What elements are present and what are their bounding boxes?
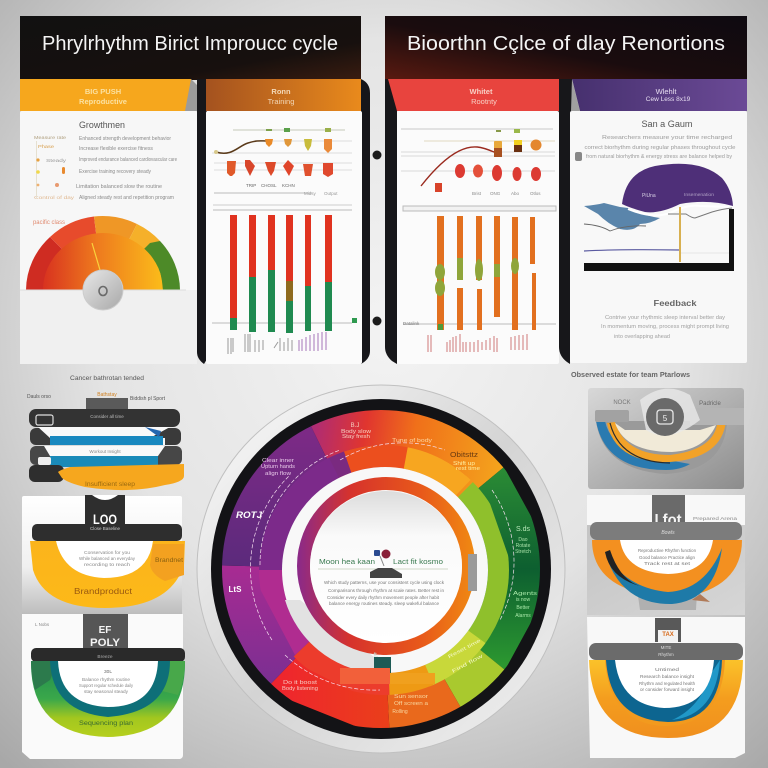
wedge labels: Sun sensor <box>394 694 428 700</box>
center body text: Which study patterns, use your consistent cycle using clock <box>324 580 445 586</box>
card: wave overview: Feedback <box>654 299 697 308</box>
stacked band group: Bathstay <box>97 392 117 398</box>
card: gray dial <box>588 388 744 489</box>
green bar blobs <box>435 258 519 330</box>
panel: right stacked cards <box>571 370 745 758</box>
card: wave overview: Wlehlt <box>656 87 677 96</box>
red markers <box>435 164 541 192</box>
bar labels: CHOSL <box>261 183 277 188</box>
chart: semicircle gauge: pacific class <box>33 220 65 226</box>
bowl text: Conservation for you <box>84 550 130 556</box>
wedge labels <box>229 423 538 715</box>
white ring <box>282 467 488 673</box>
wedge labels: Alarms <box>515 613 531 619</box>
card: yellow bowl: Brandproduct <box>74 587 133 596</box>
stacked band group: Biddish pl Sport <box>130 396 166 402</box>
small left legend <box>34 135 75 200</box>
wedge labels: LtS <box>229 585 242 594</box>
left report title banner <box>20 16 361 80</box>
card: daily curve: Rootnty <box>471 97 497 106</box>
stacked band group <box>27 392 184 490</box>
card: wave overview: San a Gaum <box>642 119 692 129</box>
bottom teal tab <box>374 657 391 673</box>
wedge labels: ROTJ <box>236 510 263 520</box>
wedge labels: Reset time <box>447 638 482 660</box>
wedge labels: B.J <box>351 423 359 429</box>
chart: purple dome and waves: PiUna <box>642 193 656 199</box>
legend dots <box>36 141 65 198</box>
stacked band group: Workout Insight <box>89 449 121 454</box>
card: yellow bowl: Close Baseline <box>90 526 120 531</box>
wedge labels: Dao <box>518 537 528 543</box>
bowl text: or consider forward insight <box>640 687 695 693</box>
wedge labels: Rolling <box>392 709 408 715</box>
right report title banner: Bioorthn Cçlce of dlay Renortions <box>407 33 725 55</box>
intro text <box>584 135 736 160</box>
feedback text: into overlapping ahead <box>614 334 670 340</box>
wedge labels: align flow <box>265 471 291 477</box>
growth text lines: Limitation balanced slow the routine <box>76 184 162 190</box>
card: yellow blue bowl: Rhythm <box>658 652 674 657</box>
bar labels: Midsy <box>304 191 317 196</box>
left report title banner: Phrylrhythm Birict Improucc cycle <box>42 33 338 55</box>
bowl text: Balance rhythm routine <box>82 677 130 683</box>
card: wave overview <box>570 79 747 363</box>
small left legend: Steady <box>46 158 67 163</box>
bar labels <box>403 191 541 326</box>
stacked band group: Insufficient sleep <box>85 481 135 488</box>
intro text: Researchers measure your time recharged <box>602 135 732 141</box>
bowl text: Untimed <box>655 667 679 673</box>
wedge labels: Do it boost <box>283 680 318 686</box>
intro text: from natural biorhythm & energy stress are balance helped by <box>586 154 732 160</box>
bowl text <box>638 548 696 567</box>
growth text lines: Aligned steady rest and repetition program <box>79 195 174 201</box>
card: wave overview: Cew Less 8x19 <box>646 96 691 103</box>
card: orange bowl: Bowls <box>661 530 675 536</box>
wedge labels: Body listening <box>282 686 318 692</box>
bar labels: Datalink <box>403 321 420 326</box>
main circle diagram <box>197 385 565 753</box>
small icon badge <box>575 152 582 161</box>
side tab <box>468 554 477 591</box>
center body text: Consider every daily rhythm movement people after habit <box>327 595 440 601</box>
growth text lines: Increase flexible exercise fitness <box>79 146 153 152</box>
bar labels <box>246 183 338 196</box>
panel: left stacked cards <box>22 375 185 759</box>
bar labels: ONG <box>490 191 501 196</box>
growth text lines <box>76 136 177 201</box>
bowl text: Rhythm and regulated health <box>639 681 695 687</box>
chart: purple dome and waves <box>584 164 734 271</box>
bowl text: 30L <box>104 669 112 675</box>
growth text lines: Enhanced strength development behavior <box>79 136 171 142</box>
markers row upper <box>265 128 332 153</box>
trend curve <box>421 147 500 186</box>
bar labels: TRIP <box>246 183 256 188</box>
bar labels: Otlos <box>530 191 541 196</box>
markers row cups <box>214 150 333 177</box>
card: green bowl: Breeze <box>97 654 113 660</box>
card: yellow blue bowl: MITE <box>661 645 671 650</box>
growth text lines: Improved endurance balanced cardiovascular care <box>79 157 177 163</box>
card: routine bars: Ronn <box>271 87 291 96</box>
card: yellow bowl: LOO <box>93 511 117 527</box>
bar chart: red and green <box>230 215 357 333</box>
bowl text: Support regular schedule daily <box>79 683 133 689</box>
wedge labels: Better <box>516 605 530 611</box>
bottom orange strip <box>340 668 435 684</box>
tick marks <box>228 332 326 354</box>
wedge labels: Obitsttz <box>450 452 479 459</box>
card: green bowl <box>22 614 185 759</box>
bowl text: Track rest at set <box>644 561 691 567</box>
bowl text: stay seasonal steady <box>84 689 129 695</box>
bowl text <box>79 669 133 695</box>
card: routine bars <box>206 79 362 364</box>
panel: left report <box>20 16 370 364</box>
panel: right report <box>385 16 747 364</box>
upper markers <box>494 129 542 157</box>
card: routine bars: Training <box>268 97 294 106</box>
center title and icon <box>318 550 448 578</box>
card: daily curve: Whitet <box>470 87 493 96</box>
guide rails <box>212 130 352 323</box>
section caption: Cancer bathrotan tended <box>70 375 144 382</box>
stacked band group: Consider all time <box>90 414 124 419</box>
bar chart: orange <box>437 216 536 330</box>
side dark spine <box>385 79 572 364</box>
stacked band group: Dauls orso <box>27 394 51 400</box>
outer rim <box>197 385 565 753</box>
center title and icon: Lact fit kosmo <box>393 557 443 566</box>
growth text lines: Exercise training recovery steady <box>79 169 151 175</box>
wedge labels: Agents <box>513 591 538 597</box>
connector dots <box>372 150 382 326</box>
chart: purple dome and waves: Insemenation <box>684 192 715 197</box>
wedge labels: S.ds <box>516 526 530 533</box>
wedge labels: Off screen a <box>394 701 428 707</box>
center body text: Comparisons through rhythm at scale rates. Better rest in <box>328 588 444 594</box>
tick marks <box>428 334 527 352</box>
bowl text: Good balance Practice align <box>639 555 695 561</box>
card: growth column: Reproductive <box>79 97 127 106</box>
chart: semicircle gauge <box>20 216 186 310</box>
card: green bowl: L Nobs <box>35 622 50 627</box>
bowl text: Research balance insight <box>640 674 695 680</box>
card: gray dial: NOCK <box>613 400 631 406</box>
card: growth column: Growthmen <box>79 120 125 130</box>
black ring <box>211 399 551 739</box>
wedge labels: ft. <box>373 653 379 659</box>
side dark spine <box>197 79 370 364</box>
center title and icon: Moon hea kaan <box>319 557 375 566</box>
bar labels: Output <box>324 191 338 196</box>
dashed orbit lines <box>250 443 514 690</box>
wedge labels: Rotate <box>516 543 531 549</box>
card: yellow bowl: Brandnet <box>155 558 183 564</box>
center body text <box>324 580 445 607</box>
wedge labels: rest time <box>456 466 480 472</box>
bar labels: Brist <box>472 191 482 196</box>
wedge labels: Stay fresh <box>342 434 370 440</box>
center disk <box>310 491 462 643</box>
small left legend: Phase <box>38 144 55 149</box>
card: yellow blue bowl: TAX <box>662 632 674 638</box>
bowl text: While balanced an everyday <box>79 556 136 562</box>
card: green bowl: EF <box>99 625 111 636</box>
card: orange bowl: I fot <box>654 512 682 529</box>
bar labels: KCHN <box>282 183 295 188</box>
feedback text: Contrive your rhythmic sleep interval better day <box>605 315 725 321</box>
bowl text <box>79 550 136 568</box>
card: gray dial: Padricle <box>699 401 721 407</box>
wedge labels: is now <box>516 597 530 603</box>
wedge labels: Shift up <box>453 461 475 467</box>
small left legend: Measure rate <box>34 135 67 140</box>
small left legend: Control of day <box>34 195 75 200</box>
bowl text: recording to reach <box>84 562 130 568</box>
card: orange bowl: Prepared Arena <box>693 516 738 521</box>
guide rails <box>401 129 556 324</box>
feedback text <box>601 315 729 340</box>
card: green bowl: Sequencing plan <box>79 720 133 727</box>
wedge labels: Clear inner <box>262 458 294 464</box>
card: growth column <box>20 79 197 364</box>
bar labels: Abo <box>511 191 520 196</box>
wedge labels: Stretch <box>515 549 531 555</box>
wedge labels: Body slow <box>341 429 372 435</box>
wedge labels: Find flow <box>451 653 485 675</box>
wedge labels: Upturn hands <box>261 464 296 470</box>
feedback text: In momentum moving, process might prompt living <box>601 324 729 330</box>
intro text: correct biorhythm during regular phases throughout cycle <box>584 145 736 151</box>
section caption: Observed estate for team Ptarlows <box>571 370 690 379</box>
card: gray dial: 5 <box>663 414 668 423</box>
colored wedges <box>222 410 540 728</box>
trend curve <box>216 141 268 153</box>
card: yellow blue bowl <box>587 617 745 758</box>
card: green bowl: POLY <box>90 637 121 649</box>
right report title banner <box>385 16 747 80</box>
card: orange bowl <box>587 495 745 615</box>
card: daily curve <box>388 79 559 364</box>
colored thin ring <box>304 484 468 648</box>
bowl text <box>639 667 695 693</box>
bowl text: Reproductive Rhythm function <box>638 548 696 554</box>
card: growth column: BIG PUSH <box>85 87 121 96</box>
center body text: balance energy routines steady. sleep wakeful balance <box>329 601 439 607</box>
wedge labels: Tune of body <box>392 438 433 444</box>
inner colored band <box>259 445 509 695</box>
card: yellow bowl <box>22 495 185 614</box>
